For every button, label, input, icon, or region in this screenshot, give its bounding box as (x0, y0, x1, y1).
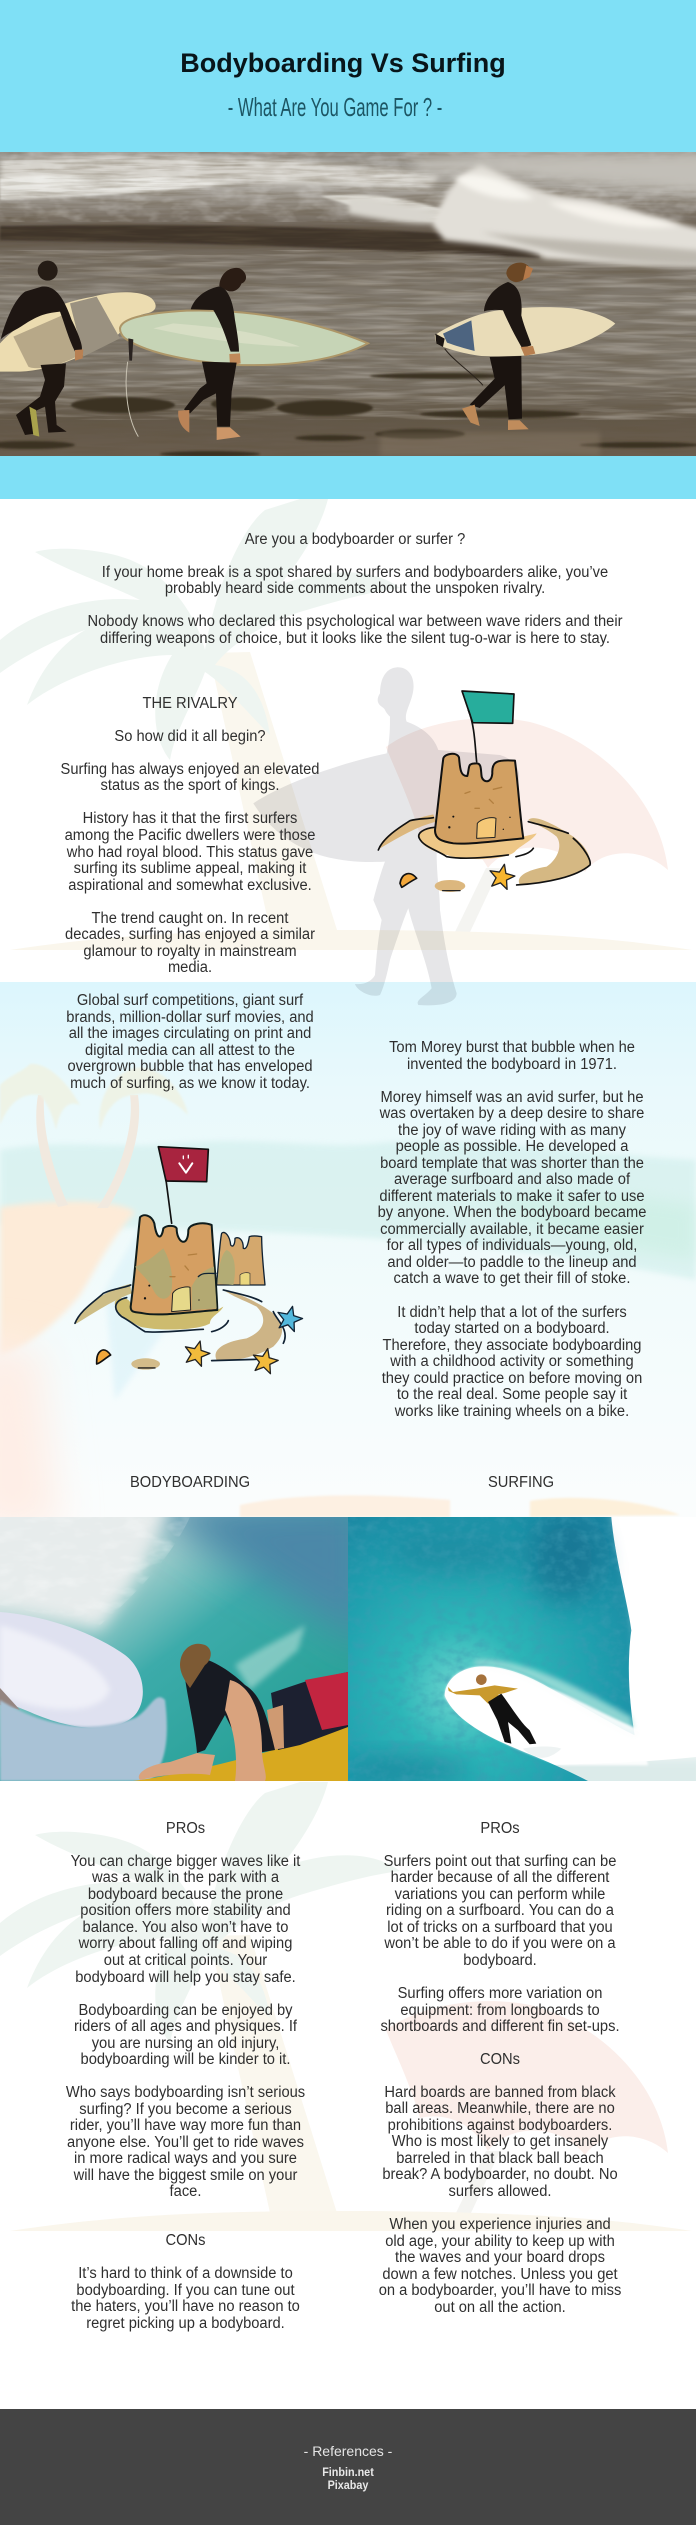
surfing cons text: old age, your ability to keep up with (385, 2233, 615, 2250)
photo: bodyboarder in wave barrel (0, 1517, 348, 1781)
bodyboarding cons text: regret picking up a bodyboard. (86, 2315, 285, 2332)
rivalry history text: who had royal blood. This status gave (67, 844, 313, 861)
tom morey text: catch a wave to get their fill of stoke. (394, 1270, 630, 1287)
bodyboarding pros heading: PROs (166, 1820, 205, 1837)
bodyboarding pros text: was a walk in the park with a (92, 1869, 279, 1886)
surfing pros text: won’t be able to do if you were on a (384, 1935, 616, 1952)
surfing pros text: Surfing offers more variation on (398, 1985, 602, 2002)
hero photo: surfers on the shore (0, 152, 696, 457)
surfing cons text: ball areas. Meanwhile, there are no (385, 2100, 615, 2117)
cyan scenic section background (0, 982, 696, 1530)
intro text (88, 531, 622, 647)
bodyboarding pros text: riders of all ages and physiques. If (74, 2018, 297, 2035)
tom morey text: by anyone. When the bodyboard became (378, 1204, 646, 1221)
bodyboarding pros text: balance. You also won’t have to (83, 1919, 288, 1936)
rivalry history text: brands, million-dollar surf movies, and (66, 1009, 314, 1026)
surfing cons text (379, 2084, 621, 2316)
surfing cons text: When you experience injuries and (389, 2216, 611, 2233)
rivalry history text (61, 728, 319, 1092)
bodyboarding pros text: you are nursing an old injury, (92, 2035, 279, 2052)
bodyboarding pros text: out at critical points. Your (104, 1952, 267, 1969)
rivalry history text: status as the sport of kings. (101, 777, 279, 794)
watermark: palm tree and umbrella scene bottom (0, 1782, 692, 2231)
heading: the rivalry: THE RIVALRY (142, 695, 238, 712)
surfing pros text: equipment: from longboards to (400, 2002, 600, 2019)
footer band (0, 2409, 696, 2525)
tom morey text: different materials to make it safer to use (379, 1188, 645, 1205)
tom morey text: average surfboard and also made of (394, 1171, 630, 1188)
surfing cons text: Hard boards are banned from black (384, 2084, 616, 2101)
surfing pros text: lot of tricks on a surfboard that you (387, 1919, 613, 1936)
watermark: palm tree and umbrella scene top (0, 499, 692, 950)
tom morey text: the joy of wave riding with as many (398, 1122, 626, 1139)
rivalry history text: glamour to royalty in mainstream (83, 943, 297, 960)
surfer 1 with board (0, 261, 156, 437)
breaking wave foam right (348, 152, 696, 267)
photo: surfer in barrel (345, 1507, 696, 1784)
surfing pros text (380, 1853, 620, 2035)
rivalry history text: decades, surfing has enjoyed a similar (65, 926, 315, 943)
surfer 2 with green board (120, 268, 368, 440)
header band (0, 0, 696, 499)
intro text: probably heard side comments about the unspoken rivalry. (165, 580, 545, 597)
foam bands left (0, 155, 440, 190)
tom morey text: today started on a bodyboard. (414, 1320, 610, 1337)
surfing pros text: harder because of all the different (391, 1869, 609, 1886)
rivalry history text: overgrown bubble that has enveloped (67, 1058, 313, 1075)
surfing pros text: Surfers point out that surfing can be (384, 1853, 616, 1870)
bodyboarding pros text: bodyboard because the prone (88, 1886, 283, 1903)
bodyboarding pros text: You can charge bigger waves like it (71, 1853, 300, 1870)
intro text: If your home break is a spot shared by surfers and bodyboarders alike, you’ve (102, 564, 608, 581)
rivalry history text: much of surfing, as we know it today. (70, 1075, 310, 1092)
bodyboarding pros text: rider, you’ll have way more fun than (70, 2117, 301, 2134)
tom morey text: works like training wheels on a bike. (395, 1403, 629, 1420)
surfing pros heading: PROs (480, 1820, 520, 1837)
bodyboarding cons text: It’s hard to think of a downside to (78, 2265, 293, 2282)
bodyboarding pros text: position offers more stability and (80, 1902, 291, 1919)
bodyboarding pros text: bodyboarding will be kinder to it. (81, 2051, 290, 2068)
tom morey text: commercially available, it became easier (380, 1221, 644, 1238)
references list (322, 2465, 374, 2492)
subtitle: - What Are You Game For ? - (228, 92, 442, 122)
surfing cons text: break? A bodyboarder, no doubt. No (382, 2166, 618, 2183)
surfing cons text: out on all the action. (434, 2299, 566, 2316)
references heading: - References - (304, 2443, 392, 2459)
tom morey text: Morey himself was an avid surfer, but he (381, 1089, 643, 1106)
rivalry history text: Global surf competitions, giant surf (77, 992, 303, 1009)
tom morey text: to the real deal. Some people say it (397, 1386, 627, 1403)
tom morey text: board template that was shorter than the (380, 1155, 644, 1172)
rivalry history text: all the images circulating on print and (69, 1025, 311, 1042)
surfing cons heading: CONs (480, 2051, 520, 2068)
rocks and wet sand (0, 373, 696, 457)
bodyboarding pros text: surfing? If you become a serious (79, 2101, 292, 2118)
tom morey text: It didn’t help that a lot of the surfers (397, 1304, 627, 1320)
bodyboarding pros text: face. (170, 2183, 201, 2200)
tom morey text: with a childhood activity or something (390, 1353, 634, 1370)
surfing cons text: barreled in that black ball beach (396, 2150, 604, 2167)
beach left (0, 1201, 135, 1355)
bodyboarding cons text: the haters, you’ll have no reason to (71, 2298, 300, 2315)
palms (36, 1095, 68, 1207)
rivalry history text: surfing its sublime appeal, making it (74, 860, 306, 877)
bodyboarding pros text: in more radical ways and you sure (74, 2150, 297, 2167)
bodyboarding cons text (71, 2265, 300, 2332)
surfer 3 with white board (435, 263, 615, 430)
surfing pros text: riding on a surfboard. You can do a (386, 1902, 614, 1919)
tom morey text: they could practice on before moving on (382, 1370, 642, 1387)
rivalry history text: digital media can all attest to the (85, 1042, 295, 1059)
bodyboarding pros text (66, 1853, 305, 2200)
rivalry history text: among the Pacific dwellers were those (65, 827, 315, 844)
tom morey text (378, 1039, 646, 1420)
surfing pros text: shortboards and different fin set-ups. (380, 2018, 620, 2035)
tom morey text: Therefore, they associate bodyboarding (383, 1337, 641, 1354)
bodyboarding cons heading: CONs (165, 2232, 205, 2249)
bodyboarding pros text: anyone else. You’ll get to ride waves (67, 2134, 304, 2151)
references list: Pixabay (328, 2478, 368, 2492)
title: Bodyboarding Vs Surfing (180, 48, 506, 78)
surfing cons text: surfers allowed. (449, 2183, 551, 2200)
bodyboarding pros text: will have the biggest smile on your (74, 2167, 297, 2184)
surfing cons text: on a bodyboarder, you’ll have to miss (379, 2282, 621, 2299)
rivalry history text: So how did it all begin? (114, 728, 266, 745)
intro text: differing weapons of choice, but it looks like the silent tug-o-war is here to stay. (100, 630, 610, 647)
icon: sandcastle with red flag (75, 1147, 305, 1375)
tom morey text: was overtaken by a deep desire to share (380, 1105, 644, 1122)
surfing cons text: down a few notches. Unless you get (382, 2266, 618, 2283)
tom morey text: for all types of individuals—young, old, (387, 1237, 637, 1254)
heading: surfing: SURFING (488, 1474, 554, 1491)
surfing cons text: the waves and your board drops (395, 2249, 605, 2266)
surfing pros text: variations you can perform while (395, 1886, 605, 1903)
tom morey text: Tom Morey burst that bubble when he (389, 1039, 635, 1056)
sea horizon band (0, 1141, 696, 1280)
bodyboarding cons text: bodyboarding. If you can tune out (76, 2282, 295, 2299)
bodyboarding pros text: bodyboard will help you stay safe. (75, 1969, 296, 1986)
bodyboarding pros text: Who says bodyboarding isn’t serious (66, 2084, 305, 2101)
surfing cons text: prohibitions against bodyboarders. (388, 2117, 612, 2134)
dark band (0, 225, 540, 258)
icon: sandcastle with green flag (378, 691, 590, 892)
bodyboarding pros text: Bodyboarding can be enjoyed by (78, 2002, 293, 2019)
references list: Finbin.net (322, 2465, 374, 2479)
rivalry history text: History has it that the first surfers (83, 810, 297, 827)
rivalry history text: The trend caught on. In recent (92, 910, 288, 927)
tom morey text: and older—to paddle to the lineup and (387, 1254, 637, 1271)
bodyboarding pros text: worry about falling off and wiping (79, 1935, 292, 1952)
watermark: surfer silhouette (253, 667, 519, 1005)
rivalry history text: Surfing has always enjoyed an elevated (61, 761, 319, 778)
surfing cons text: Who is most likely to get insanely (392, 2133, 608, 2150)
heading: bodyboarding: BODYBOARDING (130, 1474, 250, 1491)
surfing pros text: bodyboard. (463, 1952, 537, 1969)
intro text: Nobody knows who declared this psychological war between wave riders and their (88, 613, 622, 630)
intro text: Are you a bodyboarder or surfer ? (245, 531, 465, 548)
rivalry history text: aspirational and somewhat exclusive. (68, 877, 312, 894)
tom morey text: people as possible. He developed a (396, 1138, 628, 1155)
rivalry history text: media. (168, 959, 212, 976)
tom morey text: invented the bodyboard in 1971. (407, 1056, 617, 1073)
